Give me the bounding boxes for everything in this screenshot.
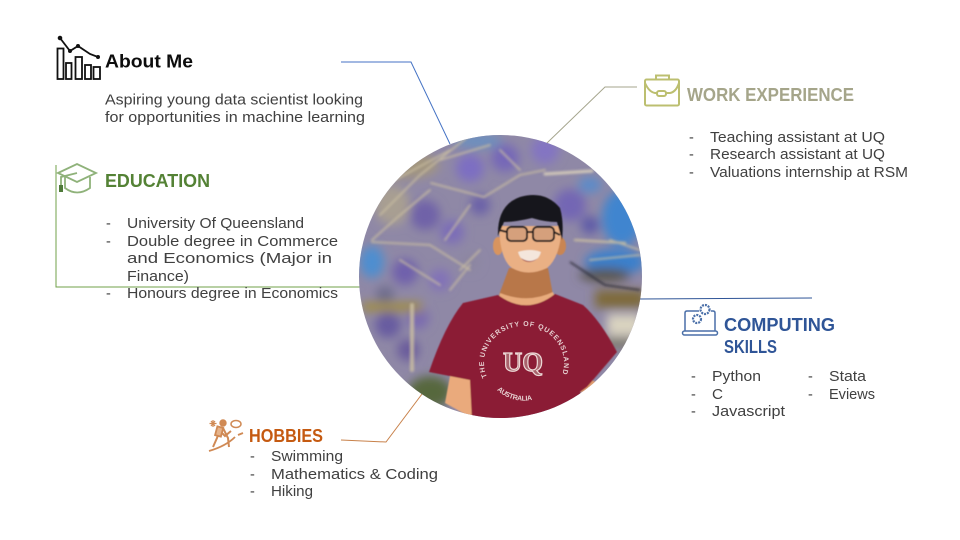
list: computing skills — [691, 369, 875, 420]
heading: hobbies: HOBBIES — [249, 425, 323, 446]
heading: computing skills: COMPUTING — [724, 314, 835, 335]
panel: hobbies — [209, 420, 438, 500]
connector: hobbies — [341, 394, 422, 442]
list: computing skills: - — [808, 369, 813, 385]
heading: computing skills — [724, 314, 835, 357]
icon: laptop with gears — [682, 305, 718, 335]
neck — [499, 268, 553, 302]
list: hobbies — [250, 449, 438, 500]
list: education: and Economics (Major in — [127, 251, 332, 267]
text: about me description — [105, 92, 365, 126]
list: computing skills: Stata — [829, 369, 867, 385]
arms — [444, 376, 472, 415]
icon: line and bar chart — [58, 36, 100, 79]
list: education: Double degree in Commerce — [127, 234, 338, 250]
connector: education — [56, 165, 360, 287]
list: education — [106, 216, 338, 302]
connector: work experience — [547, 87, 637, 143]
list: hobbies: - — [250, 467, 255, 483]
text: about me description: for opportunities in machine learning — [105, 110, 365, 126]
list: work experience: Research assistant at UQ — [710, 147, 885, 163]
panel: work experience — [645, 76, 908, 181]
list: computing skills: - — [808, 387, 813, 403]
list: hobbies: Hiking — [271, 484, 313, 500]
list: computing skills: Javascript — [712, 404, 785, 420]
list: work experience: - — [689, 130, 694, 146]
smile — [518, 250, 541, 262]
list: hobbies: Swimming — [271, 449, 343, 465]
connector: about me — [341, 62, 450, 144]
list: hobbies: Mathematics & Coding — [271, 467, 438, 483]
list: education: Finance) — [127, 269, 189, 285]
list: computing skills: C — [712, 387, 723, 403]
list: work experience: Valuations internship at RSM — [710, 165, 908, 181]
list: computing skills: - — [691, 387, 696, 403]
list: computing skills: - — [691, 404, 696, 420]
text: about me description: Aspiring young data scientist looking — [105, 92, 363, 108]
list: education: University Of Queensland — [127, 216, 304, 232]
panel: education — [58, 164, 338, 302]
list: computing skills: Eviews — [829, 387, 875, 403]
connector: computing skills — [640, 298, 812, 299]
panel: about me — [58, 36, 365, 126]
heading: about me: About Me — [105, 50, 193, 72]
list: education: Honours degree in Economics — [127, 286, 338, 302]
list: computing skills: - — [691, 369, 696, 385]
list: work experience: - — [689, 165, 694, 181]
heading: work experience: WORK EXPERIENCE — [687, 84, 854, 105]
heading: computing skills: SKILLS — [724, 336, 777, 357]
panel: computing skills — [682, 305, 875, 420]
list: education: - — [106, 216, 111, 232]
list: hobbies: - — [250, 484, 255, 500]
text: shirt lettering: UQ — [503, 347, 543, 377]
hair — [498, 195, 563, 240]
glasses — [499, 227, 560, 241]
photo: portrait in circular frame — [355, 130, 647, 422]
list: work experience: Teaching assistant at UQ — [710, 130, 885, 146]
list: work experience: - — [689, 147, 694, 163]
icon: briefcase — [645, 76, 679, 106]
list: hobbies: - — [250, 449, 255, 465]
shirt — [429, 294, 617, 421]
icon: hiker — [209, 420, 243, 451]
list: work experience — [689, 130, 908, 181]
text: shirt lettering: AUSTRALIA — [497, 388, 532, 401]
head — [493, 237, 503, 255]
list: computing skills: Python — [712, 369, 761, 385]
heading: education: EDUCATION — [105, 170, 210, 191]
text: shirt lettering: THE UNIVERSITY OF QUEENSLAND — [479, 321, 569, 379]
icon: graduation cap — [58, 164, 96, 192]
list: education: - — [106, 286, 111, 302]
branches — [372, 135, 640, 370]
list: education: - — [106, 234, 111, 250]
